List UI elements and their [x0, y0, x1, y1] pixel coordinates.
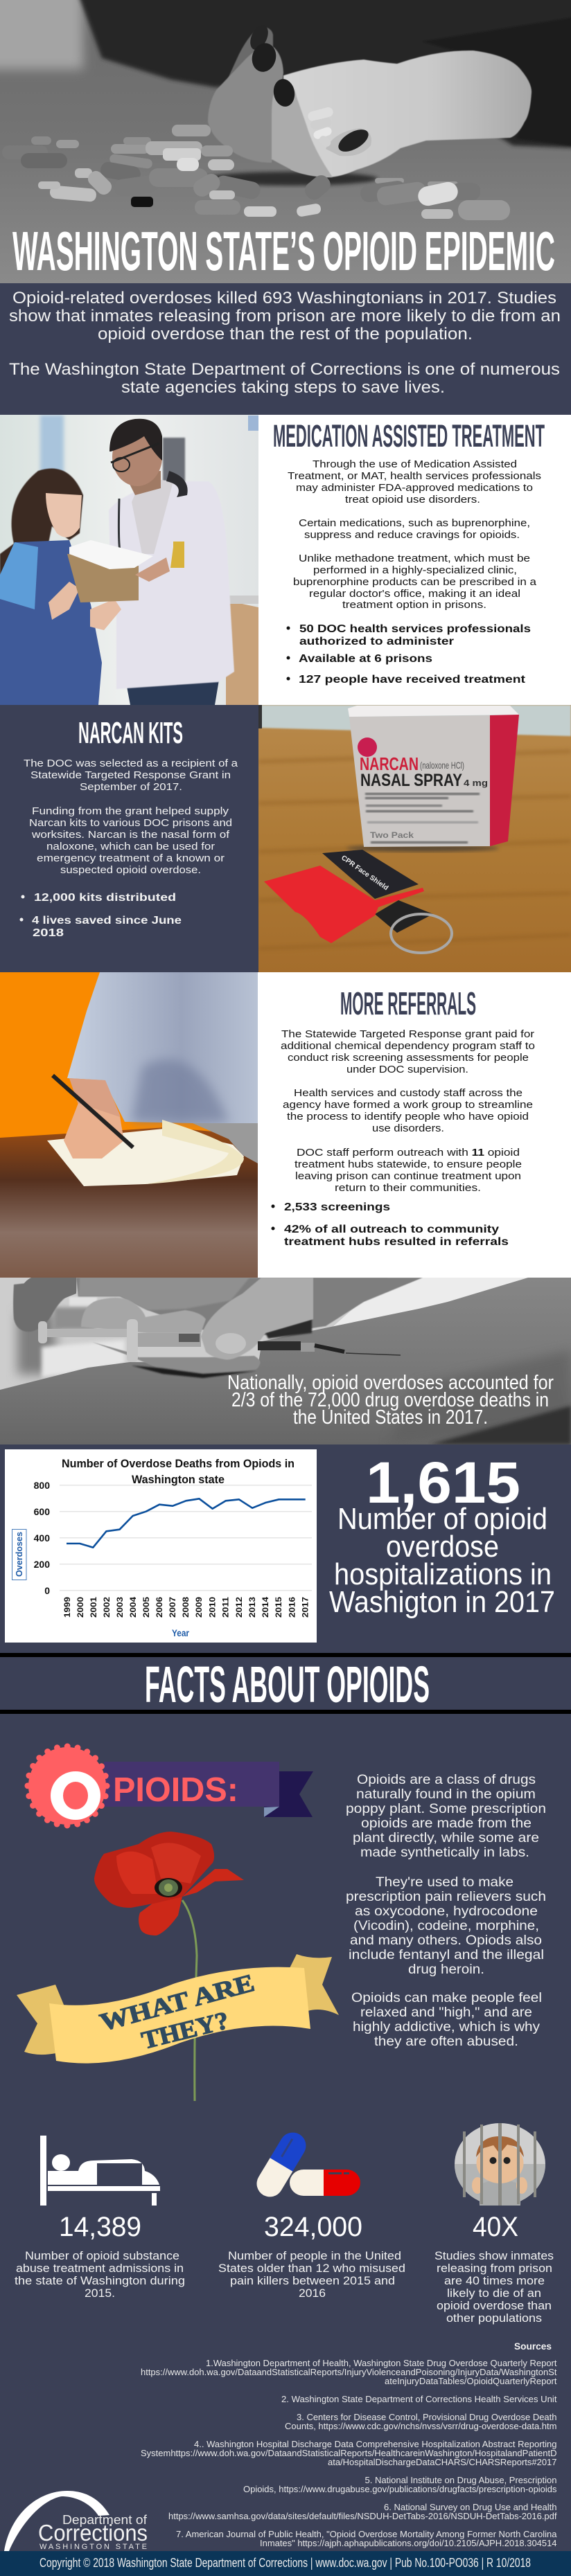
body text: additional chemical dependency program staff to — [281, 1040, 535, 1052]
icon: opioids ribbon badge: PIOIDS: — [113, 1771, 238, 1809]
y axis labels — [34, 1480, 50, 1596]
sources list: 1.Washington Department of Health, Washington State Drug Overdose Quarterly Report — [206, 2359, 557, 2368]
box label text: NASAL SPRAY — [360, 771, 462, 790]
description: the state of Washington during — [15, 2275, 185, 2287]
logo: department of corrections washington state: Corrections — [38, 2520, 148, 2546]
stat: misused pain killers — [218, 2127, 405, 2300]
bullet statistics: 2018 — [33, 927, 64, 939]
x axis year labels: 2016 — [287, 1597, 297, 1618]
bullet statistics — [272, 1201, 509, 1248]
text block: what opioids are: drug heroin. — [408, 1962, 484, 1977]
y axis title — [12, 1529, 26, 1580]
caption — [227, 1372, 554, 1429]
hand — [208, 22, 532, 177]
line chart: overdose deaths from opioids in Washington state — [5, 1449, 317, 1643]
body text: Narcan kits to various DOC prisons and — [29, 817, 232, 829]
photo: narcan nasal spray box and keychain: CPR Face Shield — [340, 854, 389, 892]
icon: capsules — [252, 2127, 360, 2202]
body text: emergency treatment of a known or — [37, 852, 225, 864]
panel: narcan kits: NARCAN KITS — [78, 716, 183, 750]
body text: Funding from the grant helped supply — [32, 805, 229, 817]
box label text: Two Pack — [370, 830, 414, 840]
box label text: 4 mg — [464, 778, 488, 788]
body text: Certain medications, such as buprenorphine, — [299, 517, 530, 529]
sources list: https://www.samhsa.gov/data/sites/default/files/NSDUH-DetTabs-2016/NSDUH-DetTabs-2016.pdf — [168, 2512, 557, 2521]
y axis labels: 0 — [44, 1585, 50, 1596]
sources list: ateInjuryDataTables/OpioidQuarterlyReport — [385, 2377, 557, 2386]
sources list — [141, 2341, 557, 2548]
x axis year labels: 2012 — [234, 1597, 244, 1618]
text block: what opioids are: poppy plant. Some prescription — [346, 1802, 546, 1816]
body text: the process to identify people who have opioid — [287, 1111, 529, 1122]
text block: what opioids are: Opioids can make people feel — [351, 1991, 542, 2005]
hand — [13, 1278, 423, 1378]
body text: leaving prison can continue treatment upon — [295, 1170, 521, 1182]
description: 2016 — [299, 2287, 326, 2300]
intro text panel: show that inmates releasing from prison are more likely to die from an — [9, 307, 561, 325]
pills — [2, 125, 510, 220]
body text: Health services and custody staff across the — [294, 1087, 522, 1099]
bullet statistics: 42% of all outreach to community — [284, 1224, 499, 1235]
text block: what opioids are: They're used to make — [376, 1875, 513, 1890]
x axis year labels: 1999 — [62, 1597, 72, 1618]
text block: what opioids are: plant directly, while some are — [353, 1831, 539, 1845]
stat: inmates 40 times more likely — [434, 2123, 554, 2325]
x axis year labels: 2017 — [301, 1597, 310, 1618]
body text: suppress and reduce cravings for opioids. — [304, 529, 520, 541]
sources list: 3. Centers for Disease Control, Provisional Drug Overdose Death — [297, 2413, 557, 2422]
body text: may administer FDA-approved medications to — [296, 482, 533, 494]
divider bar — [0, 1710, 571, 1714]
logo: department of corrections washington state: Department of — [62, 2513, 148, 2527]
body text — [281, 1028, 535, 1194]
body text: treatment hubs statewide, to ensure people — [295, 1159, 522, 1170]
sources list: Inmates" https://ajph.aphapublications.org/doi/10.2105/AJPH.2018.304514 — [260, 2539, 557, 2548]
icon: opioids ribbon badge — [28, 1746, 313, 1825]
text block: what opioids are: naturally found in the opium — [356, 1787, 536, 1802]
x axis year labels: 2009 — [194, 1597, 204, 1618]
x axis year labels: 2014 — [261, 1597, 270, 1618]
text block: what opioids are: and many others. Opiods also — [350, 1933, 542, 1948]
icon: hospital bed — [40, 2136, 160, 2206]
x axis title: Year — [172, 1627, 189, 1638]
x axis year labels: 2013 — [247, 1597, 257, 1618]
text block: what opioids are: opioids are made from the — [361, 1816, 532, 1831]
banner: what are they: WHAT ARE — [97, 1969, 257, 2037]
icon: prisoner behind bars — [455, 2123, 545, 2206]
hero photo: hand and spilled pills — [0, 0, 571, 283]
x axis year labels: 2001 — [89, 1597, 98, 1618]
bullet statistics: 127 people have received treatment — [299, 674, 526, 686]
bullet statistics: treatment hubs resulted in referrals — [284, 1236, 509, 1248]
bullet statistics: 12,000 kits distributed — [34, 892, 176, 904]
intro text panel: state agencies taking steps to save lives. — [121, 378, 445, 397]
text block: what opioids are: they are often abused. — [374, 2034, 518, 2049]
data line — [67, 1499, 306, 1548]
bullet statistics — [19, 892, 182, 939]
body text: under DOC supervision. — [346, 1064, 468, 1075]
x axis year labels: 2008 — [181, 1597, 191, 1618]
text block: what opioids are: include fentanyl and the illegal — [349, 1948, 544, 1962]
panel: narcan kits — [0, 705, 571, 972]
text block: what opioids are: prescription pain relievers such — [346, 1890, 546, 1904]
photo: doctor and nurse — [0, 415, 258, 705]
description — [434, 2250, 554, 2325]
body text: buprenorphine products can be prescribed in a — [293, 576, 537, 588]
description: Studies show inmates — [434, 2250, 554, 2262]
text block: what opioids are: Opioids are a class of drugs — [357, 1773, 536, 1787]
bullet statistics: Available at 6 prisons — [299, 653, 432, 665]
logo: department of corrections washington state — [4, 2491, 148, 2551]
caption: the United States in 2017. — [293, 1406, 488, 1429]
bullet statistics: 50 DOC health services professionals — [299, 623, 531, 635]
text block: what opioids are: (Vicodin), codeine, morphine, — [353, 1919, 539, 1933]
body text: The Statewide Targeted Response grant paid for — [281, 1028, 534, 1040]
box label text: NARCAN — [360, 753, 419, 774]
description: 2015. — [85, 2287, 115, 2300]
sources list: Counts, https://www.cdc.gov/nchs/nvss/vsrr/drug-overdose-data.htm — [285, 2422, 557, 2431]
callout: 1,615 hospitalizations: hospitalizations in — [334, 1557, 552, 1591]
intro text panel: Opioid-related overdoses killed 693 Washingtonians in 2017. Studies — [12, 289, 556, 307]
box label text — [360, 753, 488, 843]
x axis year labels: 2010 — [208, 1597, 218, 1618]
sources list: 2. Washington State Department of Corrections Health Services Unit — [281, 2395, 557, 2404]
bullet statistics: 2,533 screenings — [284, 1201, 390, 1213]
panel: more referrals — [0, 972, 571, 1278]
body text: Statewide Targeted Response Grant in — [30, 769, 231, 781]
x axis year labels: 2002 — [102, 1597, 112, 1618]
text block: what opioids are: made synthetically in labs. — [360, 1845, 529, 1860]
chart title — [62, 1457, 295, 1486]
intro text panel — [0, 283, 571, 415]
logo: department of corrections washington state: WASHINGTON STATE — [39, 2543, 147, 2551]
description — [218, 2250, 405, 2300]
bullet statistics: 4 lives saved since June — [32, 915, 182, 927]
description: Number of people in the United — [228, 2250, 401, 2262]
intro text panel: opioid overdose than the rest of the population. — [98, 325, 473, 343]
chart title: Number of Overdose Deaths from Opiods in — [62, 1457, 295, 1470]
x axis year labels — [62, 1597, 310, 1618]
photo: person writing in notebook — [0, 972, 258, 1278]
x axis year labels: 2007 — [168, 1597, 177, 1618]
x axis year labels: 2004 — [128, 1597, 138, 1618]
sources list: 7. American Journal of Public Health, "Opioid Overdose Mortality Among Former North Carolina — [176, 2530, 557, 2539]
sources list: Opioids, https://www.drugabuse.gov/publications/drugfacts/prescription-opioids — [243, 2485, 557, 2494]
banner: what are they: THEY? — [139, 2006, 231, 2055]
body text: suspected opioid overdose. — [60, 864, 201, 876]
photo: narcan nasal spray box and keychain — [258, 705, 571, 972]
x axis year labels: 2015 — [274, 1597, 283, 1618]
divider bar — [0, 1653, 571, 1657]
y axis title: Overdoses — [14, 1532, 24, 1577]
description: releasing from prison — [437, 2262, 552, 2275]
bullet statistics — [287, 623, 531, 686]
sources list: https://www.doh.wa.gov/DataandStatisticalReports/InjuryViolenceandPoisoning/InjuryData/WashingtonSt — [141, 2368, 557, 2377]
description: other populations — [446, 2312, 542, 2325]
y axis labels: 400 — [34, 1532, 50, 1544]
body text: use disorders. — [372, 1122, 444, 1134]
y axis labels: 600 — [34, 1506, 50, 1517]
panel: syringe photo with national statistic — [0, 1278, 571, 1444]
description: opioid overdose than — [437, 2300, 552, 2312]
callout: 1,615 hospitalizations: 1,615 — [366, 1450, 520, 1515]
description: are 40 times more — [444, 2275, 545, 2287]
footer bar — [0, 2551, 571, 2576]
sources list: Systemhttps://www.doh.wa.gov/DataandStatisticalReports/HealthcareinWashington/HospitalandPatientD — [141, 2449, 557, 2458]
body text: return to their communities. — [335, 1182, 481, 1194]
body text — [24, 758, 238, 876]
body text: regular doctor's office, making it an ideal — [309, 588, 520, 600]
body text: treat opioid use disorders. — [345, 494, 480, 506]
x axis year labels: 2003 — [115, 1597, 125, 1618]
panel: medication assisted treatment — [0, 415, 571, 705]
sources list: ata/HospitalDischargeDataCHARS/CHARSReports#2017 — [328, 2458, 557, 2467]
x axis year labels: 2006 — [155, 1597, 164, 1618]
description: States older than 12 who misused — [218, 2262, 405, 2275]
sources list: 6. National Survey on Drug Use and Health — [384, 2503, 557, 2512]
body text: worksites. Narcan is the nasal form of — [31, 829, 230, 841]
body text — [288, 458, 541, 611]
number: 324,000 — [264, 2212, 362, 2242]
body text: Unlike methadone treatment, which must be — [299, 553, 530, 564]
y axis labels: 200 — [34, 1559, 50, 1570]
description: likely to die of an — [447, 2287, 541, 2300]
body text: conduct risk screening assessments for people — [288, 1052, 529, 1064]
x axis year labels: 2005 — [141, 1597, 151, 1618]
illustration: red poppy flower — [94, 1832, 244, 2101]
body text: Treatment, or MAT, health services professionals — [288, 470, 541, 482]
intro text panel: The Washington State Department of Corrections is one of numerous — [9, 360, 560, 379]
callout: 1,615 hospitalizations — [329, 1450, 555, 1619]
body text: naloxone, which can be used for — [46, 841, 215, 852]
text block: what opioids are: relaxed and "high," and are — [360, 2005, 532, 2020]
sources list: Sources — [514, 2341, 552, 2352]
number: 40X — [473, 2212, 518, 2242]
sources list: 5. National Institute on Drug Abuse, Prescription — [364, 2476, 557, 2485]
syringe — [38, 1278, 401, 1362]
body text: performed in a highly-specialized clinic, — [313, 564, 517, 576]
sources list: 4.. Washington Hospital Discharge Data Comprehensive Hospitalization Abstract Reporting — [194, 2440, 557, 2449]
body text: Through the use of Medication Assisted — [313, 458, 517, 470]
body text: The DOC was selected as a recipient of a — [24, 758, 238, 769]
description: Number of opioid substance — [25, 2250, 179, 2262]
callout: 1,615 hospitalizations: Number of opioid — [337, 1502, 547, 1536]
stat: treatment admissions — [15, 2136, 185, 2300]
body text: DOC staff perform outreach with 11 opioid — [297, 1147, 520, 1159]
banner: what are they — [17, 1954, 339, 2064]
body text: treatment option in prisons. — [342, 599, 486, 611]
bullet statistics: authorized to administer — [299, 636, 454, 647]
description — [15, 2250, 185, 2300]
x axis year labels: 2011 — [220, 1597, 230, 1618]
text block: what opioids are — [346, 1773, 546, 2049]
callout: 1,615 hospitalizations: overdose — [386, 1530, 499, 1564]
text block: what opioids are: highly addictive, which is why — [353, 2020, 541, 2034]
y axis labels: 800 — [34, 1480, 50, 1491]
body text: September of 2017. — [80, 781, 182, 793]
number: 14,389 — [59, 2212, 141, 2242]
description: pain killers between 2015 and — [230, 2275, 395, 2287]
text block: what opioids are: as oxycodone, hydrocodone — [355, 1904, 538, 1919]
body text: agency have formed a work group to streamline — [283, 1099, 533, 1111]
box label text: (naloxone HCl) — [420, 760, 464, 771]
x axis year labels: 2000 — [76, 1597, 85, 1618]
chart title: Washington state — [132, 1473, 225, 1486]
description: abuse treatment admissions in — [16, 2262, 184, 2275]
